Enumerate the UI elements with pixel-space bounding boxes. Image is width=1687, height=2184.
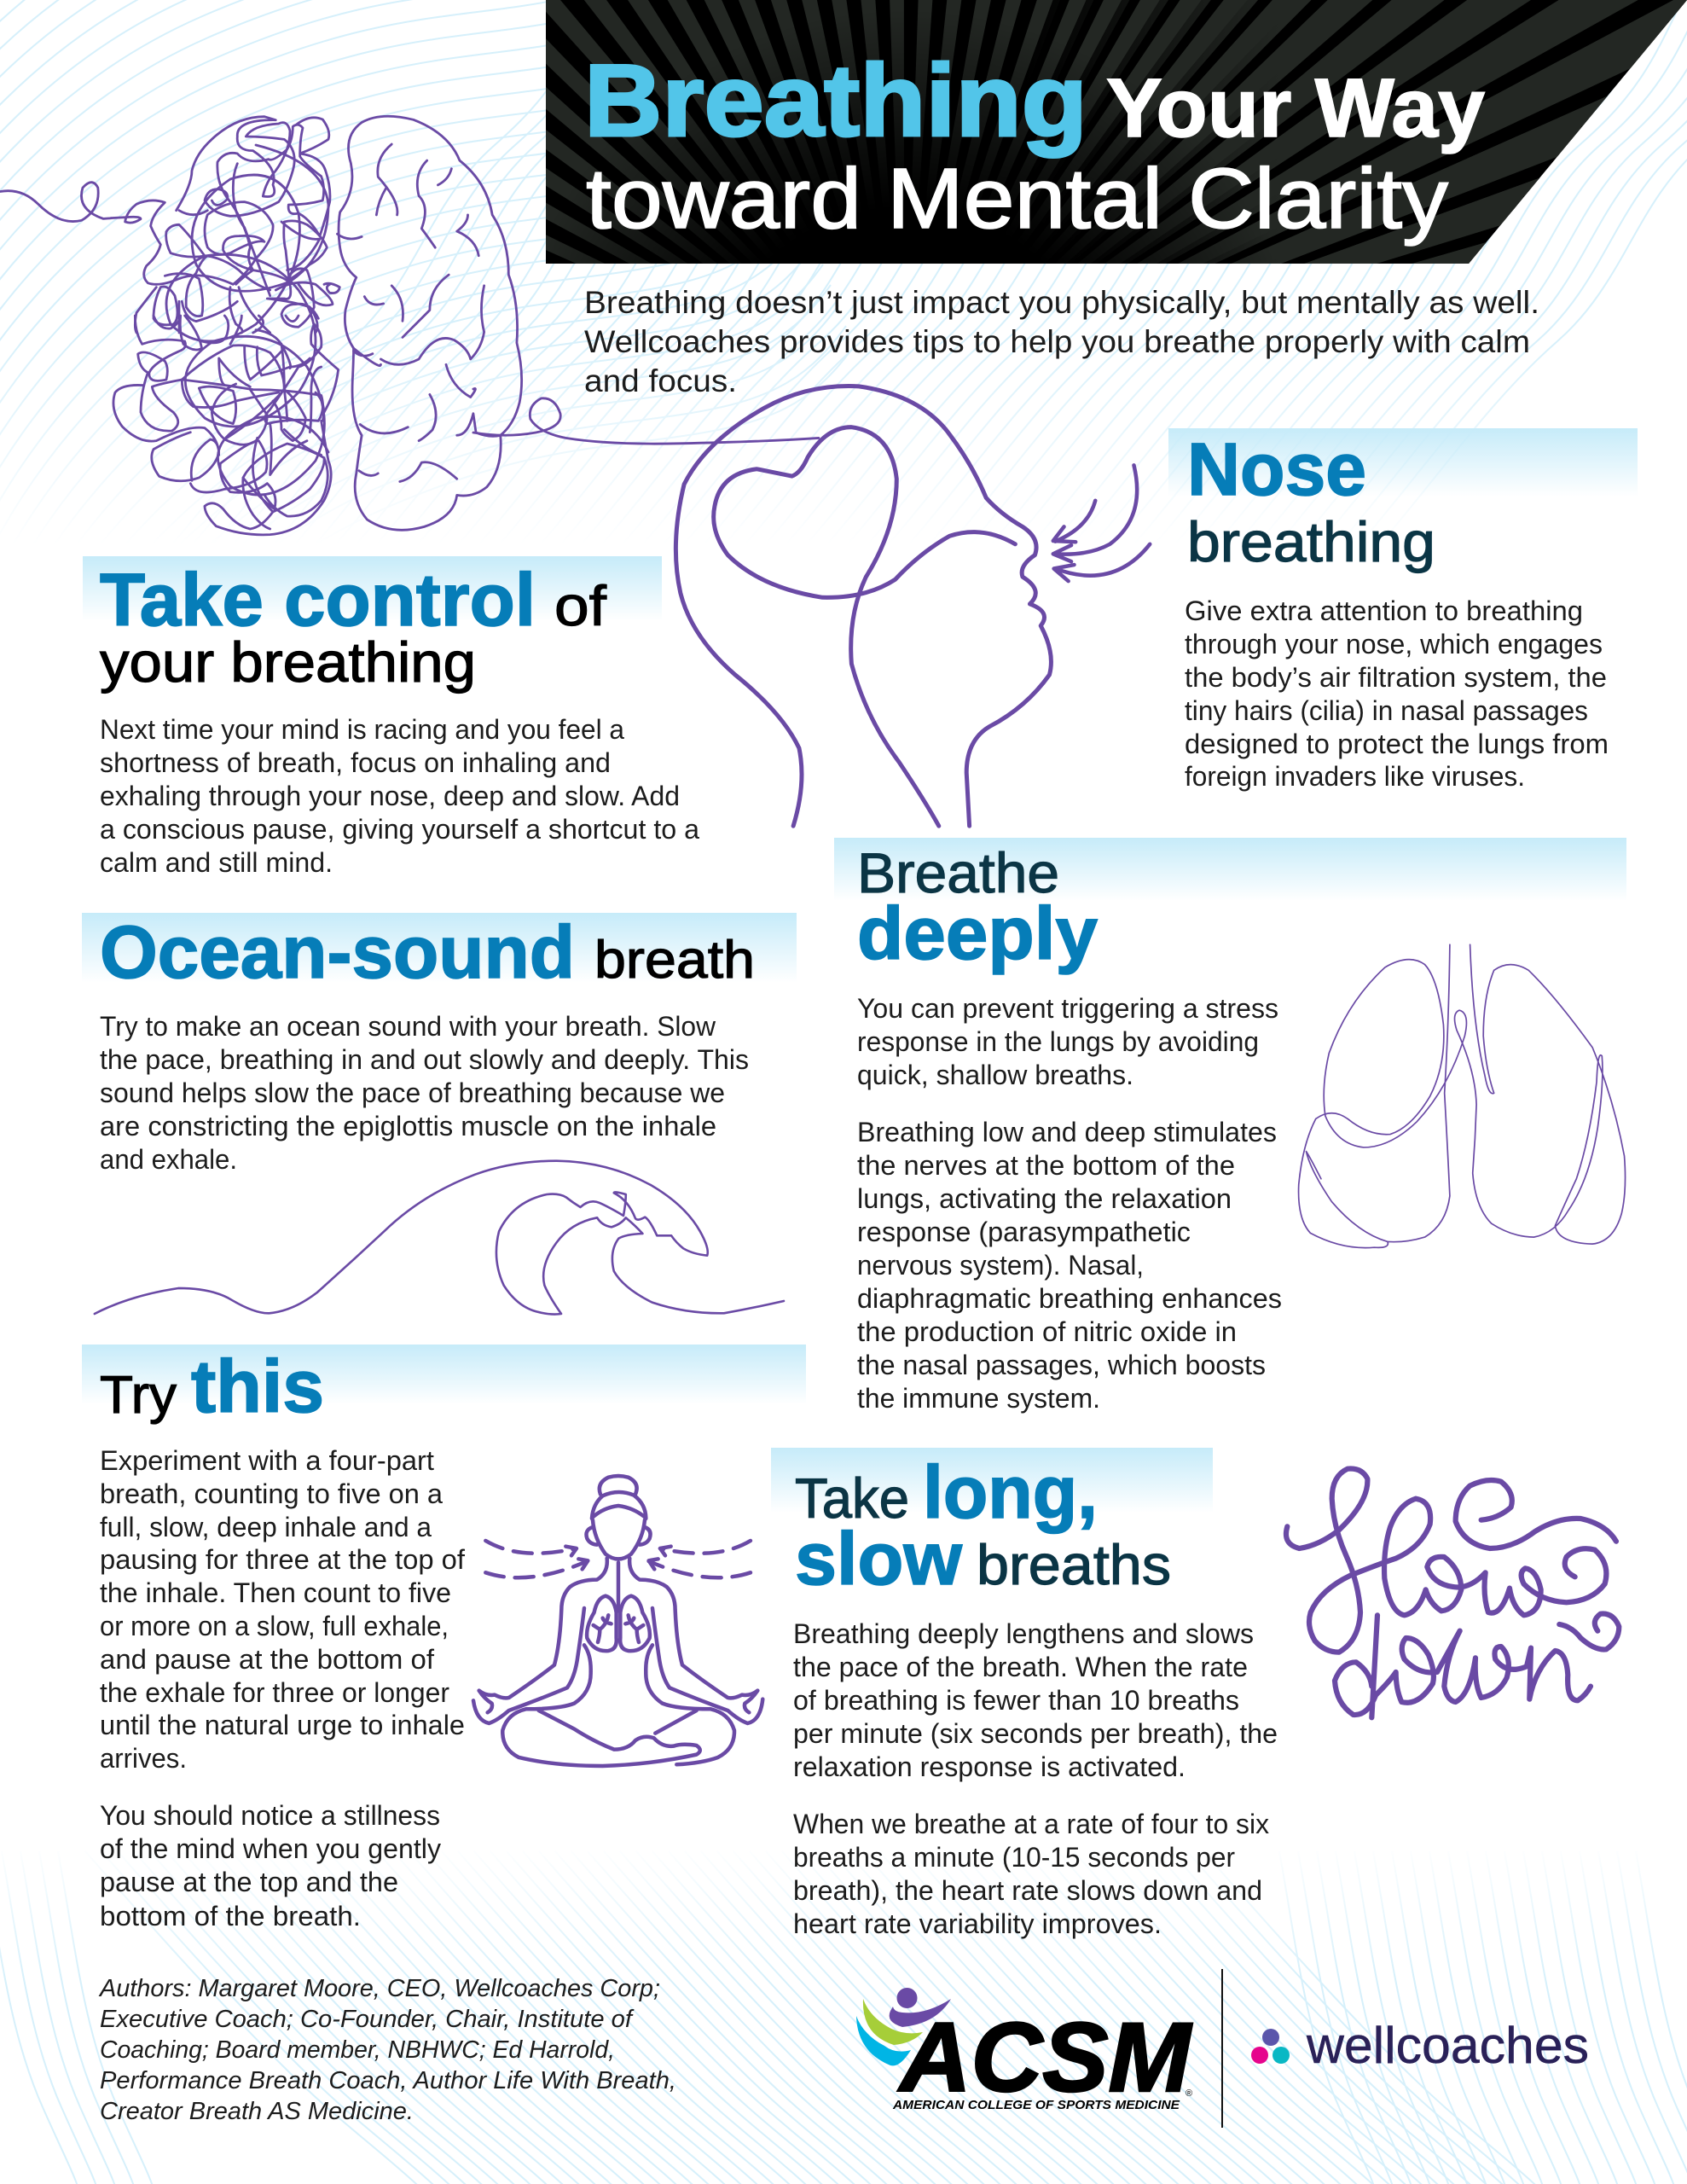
panel: breathe deeply: [834, 838, 1626, 1414]
text: nose breathing: Give extra attention to breathing: [1185, 595, 1583, 626]
text: breathe deeply: You can prevent triggering a stress: [857, 993, 1278, 1024]
authors credit: Performance Breath Coach, Author Life With Breath,: [100, 2067, 676, 2094]
heading: try this: Try: [100, 1366, 177, 1425]
text: nose breathing: foreign invaders like viruses.: [1185, 761, 1525, 792]
title text: toward Mental Clarity: [586, 151, 1448, 247]
text: long slow breaths: Breathing deeply lengthens and slows: [793, 1618, 1254, 1649]
panel: nose breathing: [1168, 428, 1638, 792]
heading: ocean-sound breath: Ocean-sound: [100, 911, 575, 994]
icon: extra tangle loops: [166, 145, 328, 495]
text: ocean-sound breath: [100, 1011, 749, 1175]
intro text: Breathing doesn’t just impact you physically, but mentally as well.: [584, 285, 1539, 320]
text: long slow breaths: per minute (six seconds per breath), the: [793, 1718, 1278, 1749]
text: long slow breaths: [793, 1618, 1278, 1939]
text: take control: a conscious pause, giving yourself a shortcut to a: [100, 814, 699, 845]
heading: breathe deeply: deeply: [857, 892, 1098, 975]
icon: head profile with heart: [675, 386, 1150, 826]
text: ocean-sound breath: the pace, breathing in and out slowly and deeply. This: [100, 1044, 749, 1075]
text: breathe deeply: diaphragmatic breathing enhances: [857, 1283, 1282, 1314]
text: nose breathing: through your nose, which engages: [1185, 629, 1603, 659]
intro text: Wellcoaches provides tips to help you breathe properly with calm: [584, 324, 1530, 359]
text: try this: the exhale for three or longer: [100, 1677, 449, 1708]
text: try this: [100, 1445, 465, 1931]
text: try this: breath, counting to five on a: [100, 1478, 443, 1509]
heading: nose breathing: breathing: [1187, 510, 1435, 573]
icon: wave: [95, 1161, 784, 1315]
icon: tangled and tidy brain: [0, 116, 819, 535]
text: nose breathing: [1185, 595, 1609, 792]
text: nose breathing: designed to protect the lungs from: [1185, 729, 1609, 759]
text: try this: the inhale. Then count to five: [100, 1577, 451, 1608]
text: try this: arrives.: [100, 1743, 187, 1774]
logo: ACSM: AMERICAN COLLEGE OF SPORTS MEDICINE: [892, 2098, 1180, 2112]
text: long slow breaths: When we breathe at a rate of four to six: [793, 1809, 1269, 1839]
text: ocean-sound breath: and exhale.: [100, 1144, 237, 1175]
thread tail entering brain: [0, 183, 111, 222]
authors credit: [98, 1975, 676, 2125]
icon: tangled left hemisphere upper: [111, 117, 339, 333]
text: breathe deeply: [857, 993, 1282, 1414]
text: try this: of the mind when you gently: [100, 1833, 441, 1864]
title text: [584, 44, 1485, 247]
text: long slow breaths: heart rate variability improves.: [793, 1908, 1162, 1939]
text: try this: pause at the top and the: [100, 1867, 398, 1897]
intro text: and focus.: [584, 363, 737, 398]
heading: try this: this: [191, 1345, 324, 1428]
text: try this: bottom of the breath.: [100, 1901, 361, 1931]
divider between logos: [1221, 1969, 1223, 2128]
text: try this: until the natural urge to inhale: [100, 1710, 465, 1740]
heading: take control: Take control: [100, 559, 536, 642]
heading: long slow breaths: breaths: [977, 1533, 1171, 1596]
text: take control: Next time your mind is racing and you feel a: [100, 714, 624, 745]
text: take control: exhaling through your nose, deep and slow. Add: [100, 781, 680, 811]
title banner: [546, 0, 1687, 264]
text: breathe deeply: Breathing low and deep stimulates: [857, 1117, 1277, 1147]
heading: nose breathing: [1187, 428, 1435, 573]
text: try this: and pause at the bottom of: [100, 1644, 434, 1675]
text: long slow breaths: relaxation response is activated.: [793, 1751, 1186, 1782]
panel: ocean-sound breath: [82, 911, 797, 1315]
text: breathe deeply: response (parasympathetic: [857, 1217, 1191, 1247]
text: try this: pausing for three at the top of: [100, 1544, 465, 1575]
text: nose breathing: tiny hairs (cilia) in nasal passages: [1185, 695, 1588, 726]
panel: take control: [83, 556, 699, 878]
thread from brain to head: [473, 398, 819, 444]
title text: Breathing: [584, 44, 1087, 158]
icon: slow down lettering: [1286, 1468, 1619, 1717]
panel: take long, slow breaths: [771, 1448, 1278, 1939]
text: breathe deeply: lungs, activating the relaxation: [857, 1183, 1232, 1214]
text: ocean-sound breath: sound helps slow the pace of breathing because we: [100, 1077, 725, 1108]
text: breathe deeply: the nasal passages, which boosts: [857, 1350, 1266, 1380]
heading: take control: of: [554, 574, 607, 637]
authors credit: Authors: Margaret Moore, CEO, Wellcoaches Corp;: [98, 1975, 660, 2002]
heading: long slow breaths: [795, 1451, 1171, 1600]
text: take control: shortness of breath, focus on inhaling and: [100, 747, 611, 778]
heading: long slow breaths: Take: [795, 1467, 909, 1530]
text: long slow breaths: breaths a minute (10-15 seconds per: [793, 1842, 1235, 1873]
icon: outlined right hemisphere: [0, 116, 819, 530]
text: long slow breaths: the pace of the breath. When the rate: [793, 1652, 1248, 1682]
text: try this: Experiment with a four-part: [100, 1445, 434, 1476]
intro text: [584, 285, 1539, 398]
text: breathe deeply: the production of nitric oxide in: [857, 1316, 1237, 1347]
text: breathe deeply: quick, shallow breaths.: [857, 1060, 1133, 1090]
text: try this: full, slow, deep inhale and a: [100, 1512, 432, 1542]
text: long slow breaths: of breathing is fewer than 10 breaths: [793, 1685, 1239, 1716]
icon: meditating figure: [473, 1476, 762, 1766]
heading: long slow breaths: slow: [795, 1518, 962, 1600]
text: breathe deeply: the immune system.: [857, 1383, 1100, 1414]
icon: lungs: [1299, 944, 1626, 1248]
text: ocean-sound breath: Try to make an ocean sound with your breath. Slow: [100, 1011, 716, 1042]
arrows into nose: [1053, 465, 1150, 581]
icon: tangled left hemisphere lower: [113, 316, 339, 535]
heading: try this: [100, 1345, 324, 1428]
text: take control: [100, 714, 699, 878]
authors credit: Coaching; Board member, NBHWC; Ed Harrold,: [100, 2036, 615, 2064]
authors credit: Creator Breath AS Medicine.: [100, 2098, 414, 2125]
text: take control: calm and still mind.: [100, 847, 333, 878]
panel: try this: [82, 1345, 806, 1931]
title text: Your Way: [1106, 61, 1485, 154]
text: breathe deeply: the nerves at the bottom of the: [857, 1150, 1235, 1181]
text: ocean-sound breath: are constricting the epiglottis muscle on the inhale: [100, 1111, 716, 1141]
heading: breathe deeply: [857, 841, 1098, 975]
logo: ACSM: ACSM: [897, 2003, 1192, 2112]
heading: nose breathing: Nose: [1187, 428, 1366, 511]
heading: take control: your breathing: [100, 630, 476, 694]
text: try this: You should notice a stillness: [100, 1800, 440, 1831]
text: try this: or more on a slow, full exhale,: [100, 1611, 449, 1641]
text: breathe deeply: nervous system). Nasal,: [857, 1250, 1144, 1281]
text: breathe deeply: response in the lungs by avoiding: [857, 1026, 1259, 1057]
logo: wellcoaches: wellcoaches: [1306, 2017, 1589, 2074]
authors credit: Executive Coach; Co-Founder, Chair, Institute of: [100, 2006, 635, 2033]
text: nose breathing: the body’s air filtration system, the: [1185, 662, 1607, 693]
heading: take control: [100, 559, 607, 694]
heading: ocean-sound breath: breath: [594, 931, 755, 990]
heading: long slow breaths: long,: [923, 1451, 1098, 1534]
logo: ACSM: ®: [1186, 2088, 1192, 2099]
text: long slow breaths: breath), the heart rate slows down and: [793, 1875, 1262, 1906]
heading: breathe deeply: Breathe: [857, 841, 1059, 904]
